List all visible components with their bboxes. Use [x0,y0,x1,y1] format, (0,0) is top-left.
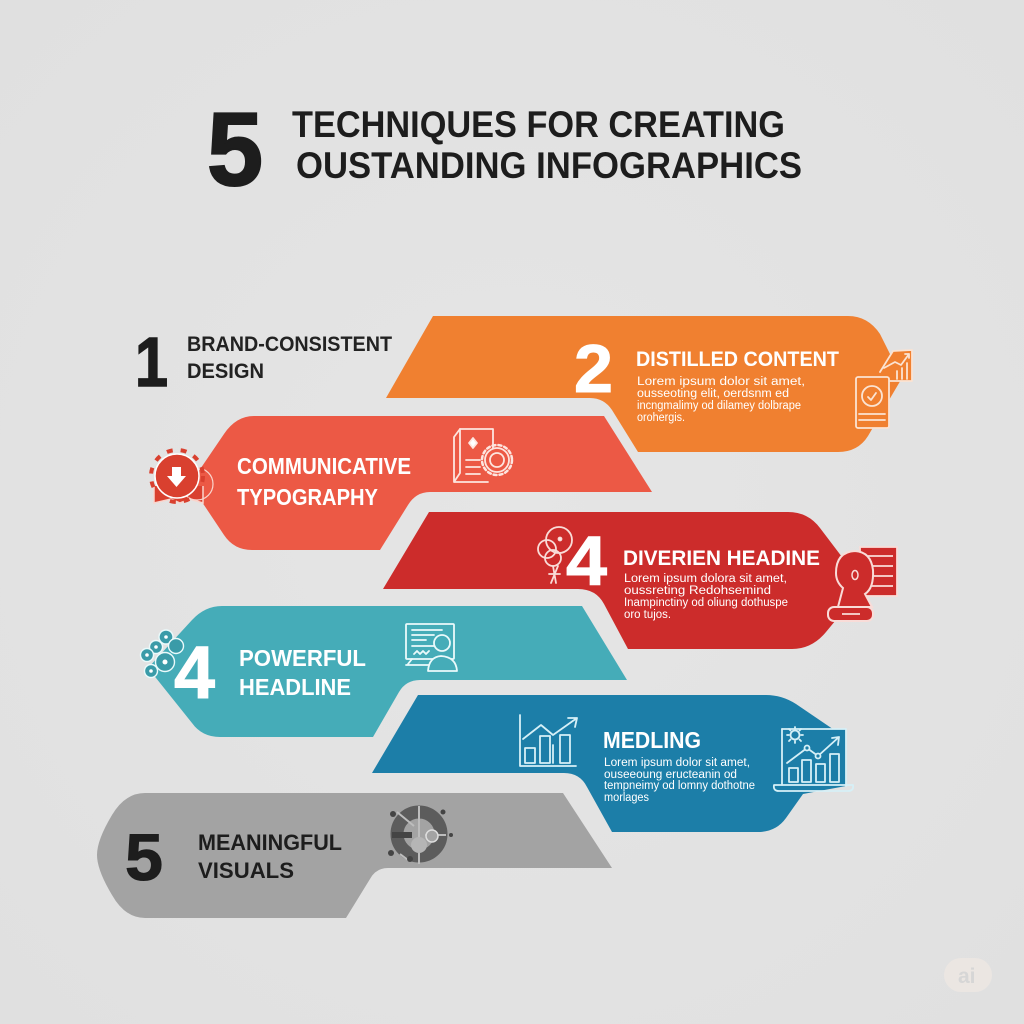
body copy [624,573,788,621]
body copy: incngmalimy od dilamey dolbrape [637,400,801,412]
body copy: oro tujos. [624,609,671,621]
panel: diverien headine [383,512,897,649]
body copy: ouseeoung eructeanin od [604,769,737,781]
icon: screen with presenter [406,624,457,671]
number 4: 4 [174,631,215,714]
gray ribbon [97,793,612,918]
icon: balloons [538,527,572,583]
heading diverien headine: DIVERIEN HEADINE [623,546,820,570]
panel: powerful headline [140,606,627,737]
icon: bar chart with arrow [520,715,577,766]
heading meaningful: MEANINGFUL [198,830,342,855]
icon: charts and tablet [856,350,912,428]
heading second line: TYPOGRAPHY [237,484,378,510]
body copy [604,757,755,804]
teal ribbon [148,606,627,737]
heading headline: HEADLINE [239,674,351,700]
body copy: Lorem ipsum dolor sit amet, [604,757,750,769]
panel: communicative typography [151,416,652,550]
heading visuals: VISUALS [198,858,294,883]
heading medling: MEDLING [603,727,701,753]
step 1 number: 1 [135,323,168,401]
icon: segmented gauge [388,806,453,864]
blue ribbon [372,695,846,832]
panel: medling [372,695,853,832]
watermark badge [944,958,992,992]
watermark badge: ai [958,965,976,988]
body copy: morlages [604,792,649,804]
panel: distilled content [386,316,912,452]
panel: meaningful visuals [97,793,612,918]
step 1 heading: BRAND-CONSISTENT [187,333,392,356]
icon: laptop with chart [774,727,853,791]
title line 2: OUSTANDING INFOGRAPHICS [296,145,802,186]
orange ribbon [386,316,902,452]
icon: document with gear [454,429,512,482]
icon: head with document [828,547,897,621]
red ribbon [383,512,864,649]
step 1 label: brand-consistent design [135,323,392,401]
title number: 5 [207,92,263,208]
body copy: tempneimy od lomny dothotne [604,780,755,792]
body copy [637,376,805,424]
number 5: 5 [125,820,163,894]
icon: connected coins [140,630,184,678]
icon: badge with arrow [151,450,213,503]
heading communicative typography: COMMUNICATIVE [237,453,411,479]
body copy: orohergis. [637,412,685,424]
body copy: ousseoting elit, oerdsnm ed [637,388,789,400]
body copy: Lorem ipsum dolora sit amet, [624,573,787,585]
title line 1: TECHNIQUES FOR CREATING [292,104,785,145]
number 2: 2 [574,331,613,407]
body copy: oussreting Redohsemind [624,585,771,597]
coral ribbon [190,416,652,550]
title [207,92,802,208]
heading powerful: POWERFUL [239,645,366,671]
step 1 heading second line: DESIGN [187,360,264,383]
number 4: 4 [566,522,607,600]
heading distilled content: DISTILLED CONTENT [636,347,839,371]
body copy: Lorem ipsum dolor sit amet, [637,376,805,388]
body copy: Inampinctiny od oliung dothuspe [624,597,788,609]
